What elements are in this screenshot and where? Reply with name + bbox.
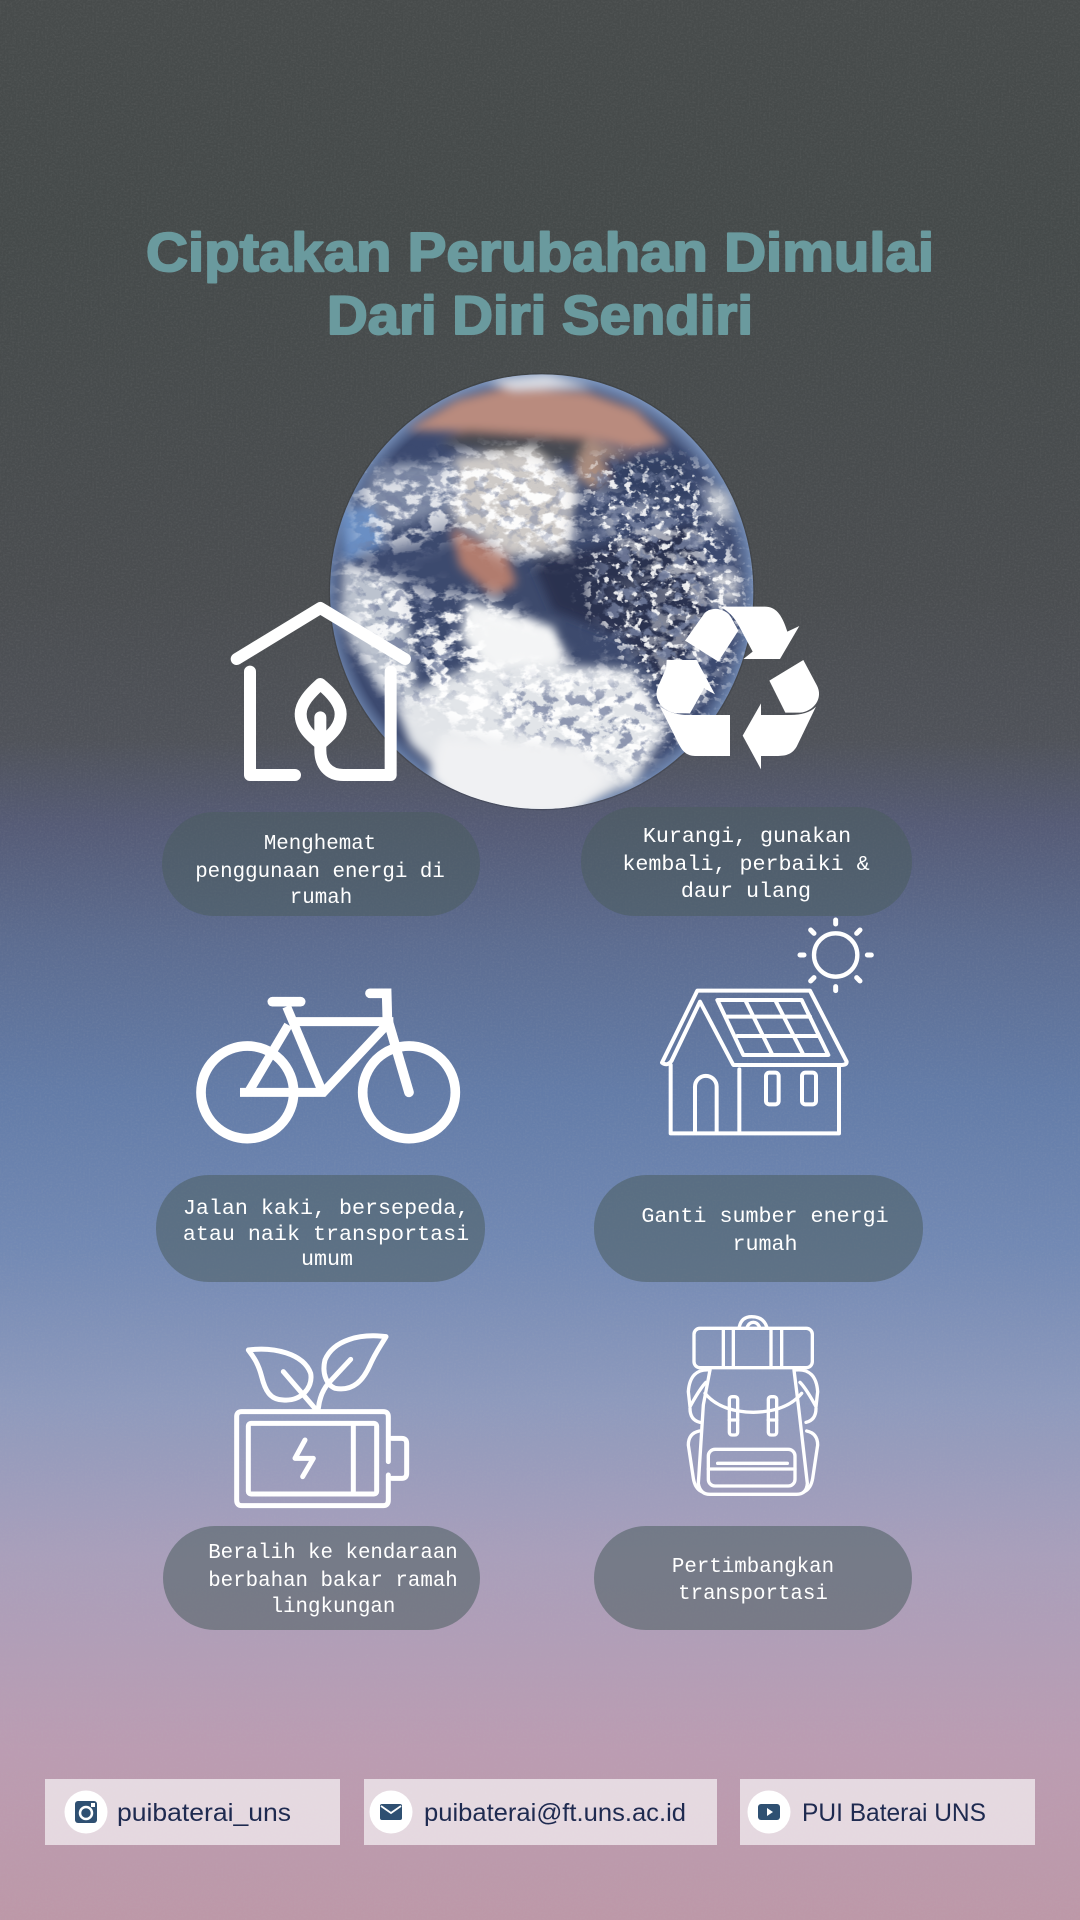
text: ganti sumber energi: Ganti sumber energi (641, 1204, 889, 1229)
text: kendaraan ramah lingkungan: Beralih ke kendaraan (208, 1542, 458, 1565)
icon: house with leaf (237, 608, 405, 775)
title: Dari Diri Sendiri (327, 284, 753, 346)
title: Ciptakan Perubahan Dimulai (146, 221, 934, 283)
text: jalan kaki (183, 1196, 469, 1272)
text: jalan kaki: atau naik transportasi (183, 1222, 469, 1247)
text: ganti sumber energi: rumah (732, 1232, 798, 1257)
icon: solar house and sun (662, 920, 871, 1133)
icon: backpack (688, 1317, 818, 1494)
text: hemat energi (195, 833, 445, 910)
text: hemat energi: penggunaan energi di (195, 861, 445, 884)
text: kendaraan ramah lingkungan: berbahan bakar ramah (208, 1570, 458, 1593)
panel: instagram contact: puibaterai_uns (117, 1799, 291, 1827)
text: ganti sumber energi (641, 1204, 889, 1257)
text: kurangi (622, 824, 870, 904)
text: pertimbangkan transportasi: Pertimbangkan (672, 1556, 834, 1579)
text: kurangi: kembali, perbaiki & (622, 852, 870, 877)
text: pertimbangkan transportasi (672, 1556, 834, 1606)
title (146, 221, 934, 346)
panel: instagram contact (45, 1779, 340, 1845)
image: planet earth (320, 370, 760, 817)
text: kurangi: Kurangi, gunakan (643, 824, 851, 849)
panel: pill backgrounds (156, 807, 923, 1630)
text: pertimbangkan transportasi: transportasi (678, 1583, 828, 1606)
icon: recycle symbol (657, 607, 819, 769)
text: jalan kaki: umum (301, 1247, 353, 1272)
icon: battery with leaves (237, 1336, 407, 1506)
text: kurangi: daur ulang (681, 879, 811, 904)
text: kendaraan ramah lingkungan: lingkungan (271, 1596, 395, 1619)
panel: youtube contact: PUI Baterai UNS (802, 1799, 986, 1827)
text: kendaraan ramah lingkungan (208, 1542, 458, 1619)
panel: email contact (364, 1779, 717, 1845)
panel: email contact: puibaterai@ft.uns.ac.id (424, 1799, 686, 1827)
text: hemat energi: Menghemat (264, 833, 376, 856)
text: jalan kaki: Jalan kaki, bersepeda, (183, 1196, 469, 1221)
panel: youtube contact (740, 1779, 1035, 1845)
icon: bicycle (201, 993, 455, 1139)
text: hemat energi: rumah (290, 887, 352, 910)
